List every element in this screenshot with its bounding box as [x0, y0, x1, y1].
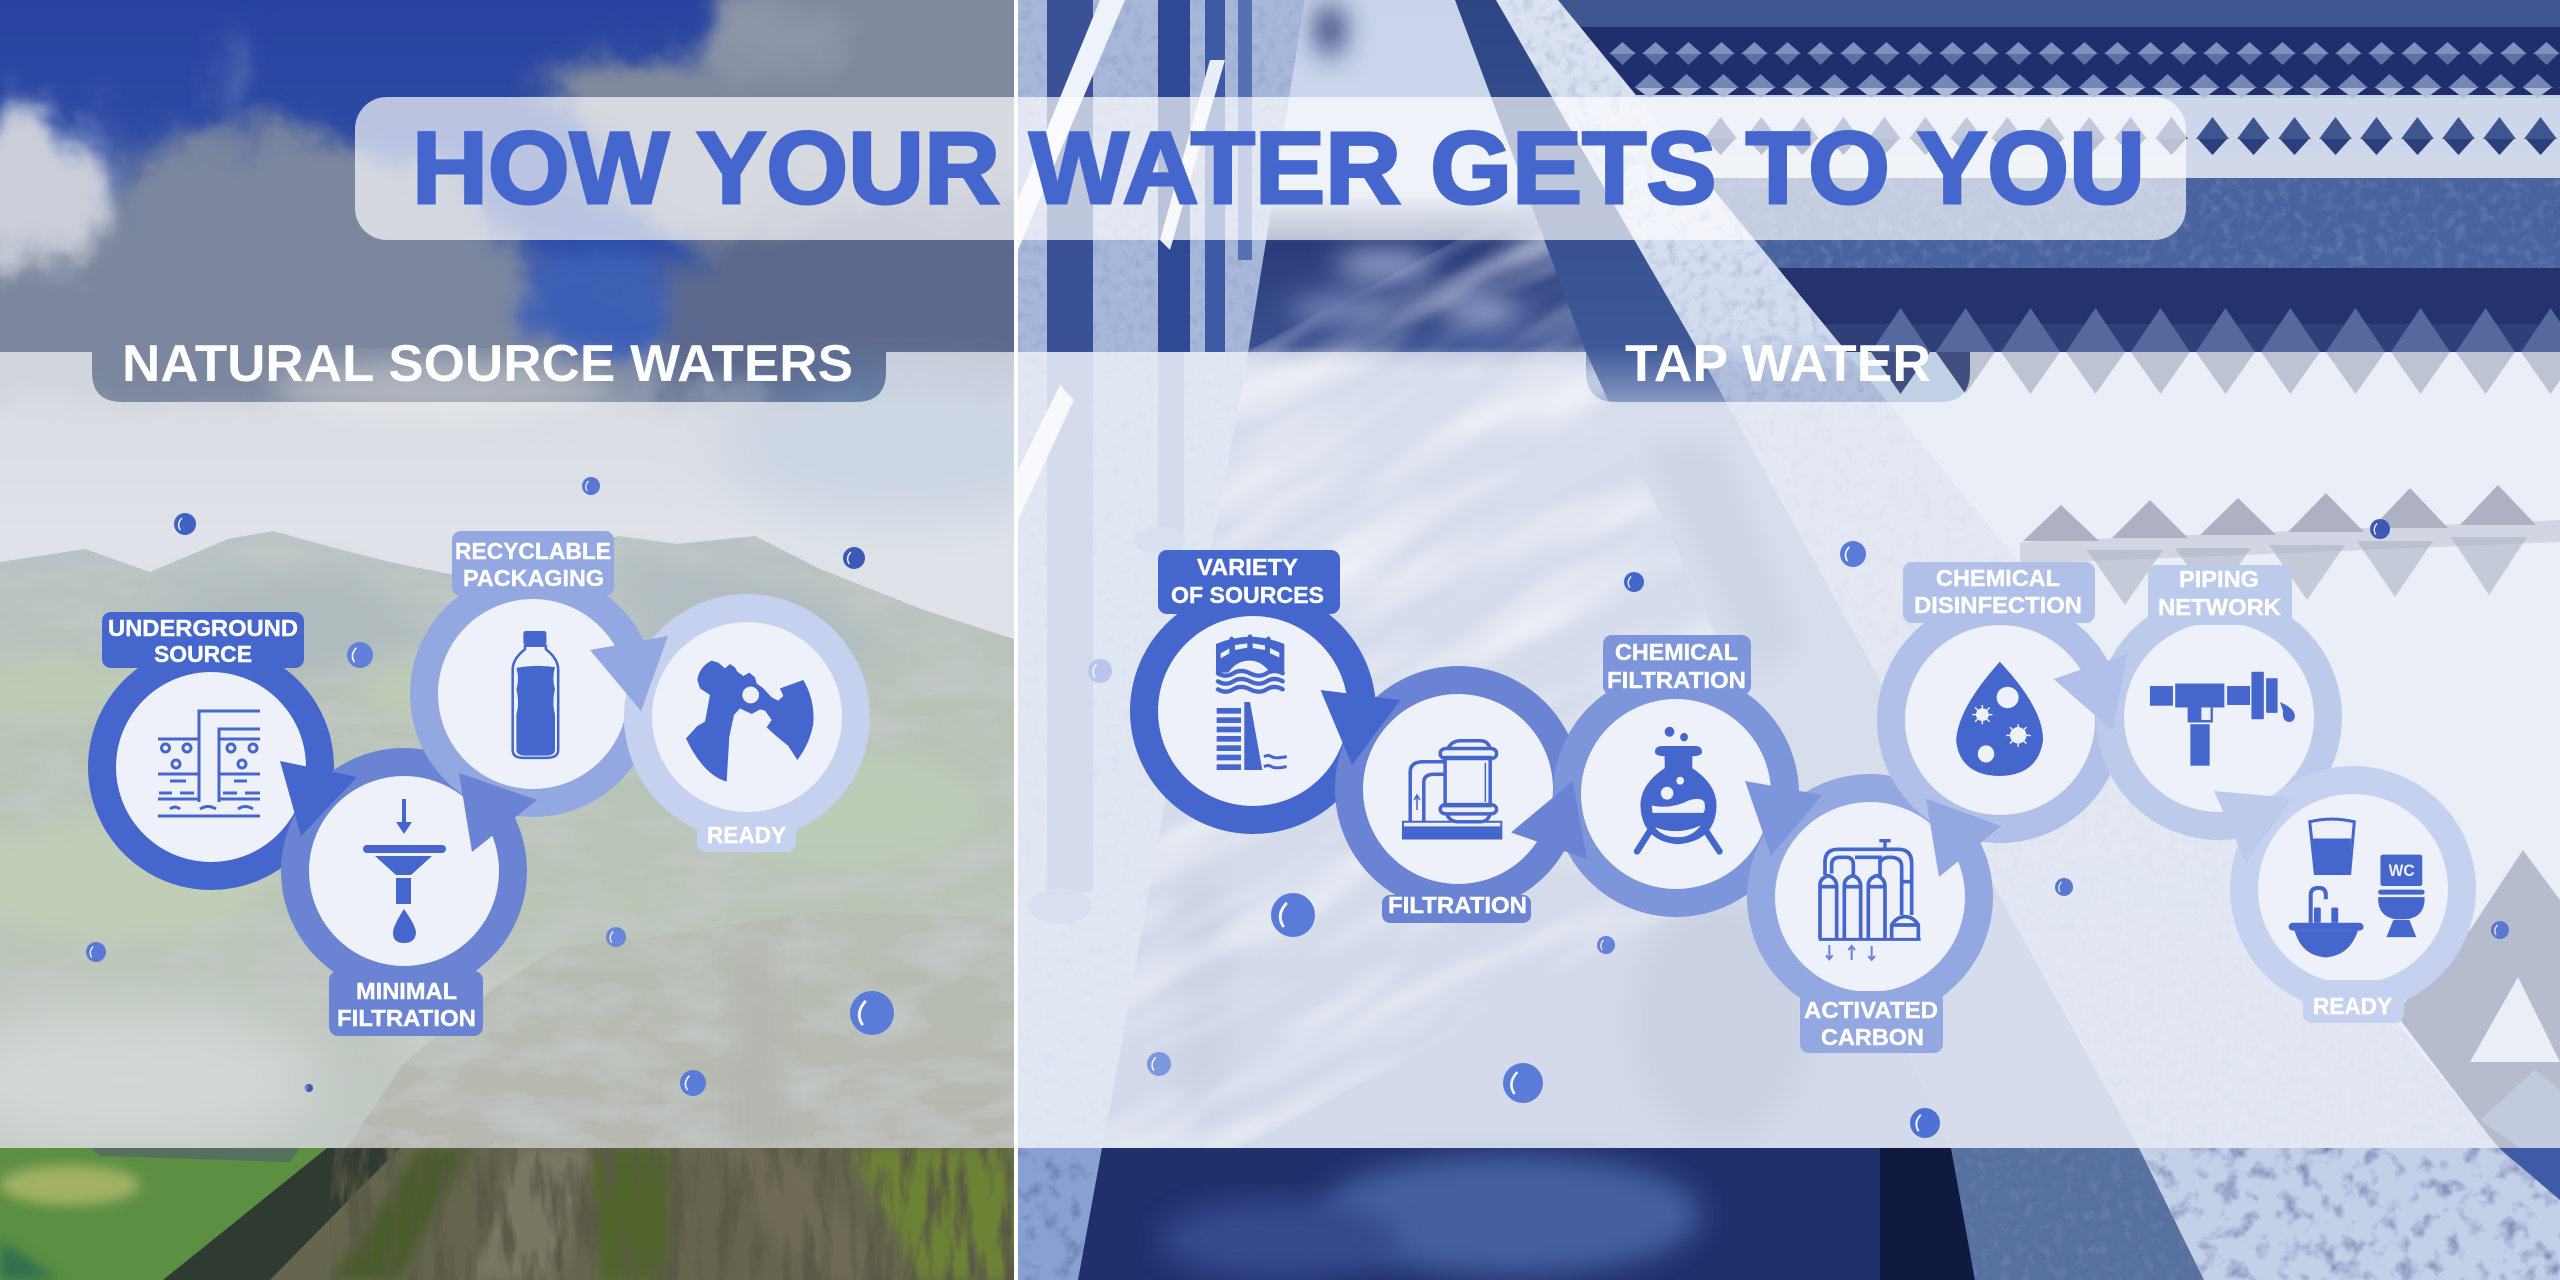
- icon: funnel filter and drop: [363, 799, 446, 943]
- step: ready to use at tap: READY: [2313, 993, 2392, 1019]
- water droplets: natural source panel: [86, 477, 894, 1096]
- icon: water bottle: [513, 631, 558, 758]
- step: ready to drink: READY: [707, 822, 786, 848]
- step: minimal filtration: MINIMAL: [356, 978, 457, 1004]
- icon: carbon filter cylinders: [1819, 841, 1921, 960]
- step: filtration: FILTRATION: [1388, 892, 1527, 918]
- arrow: minimal filtration to recyclable packaging: [459, 773, 537, 852]
- icon: water drop with microbes: [1956, 662, 2043, 776]
- arrow: underground source to minimal filtration: [280, 761, 357, 836]
- step: recyclable packaging: PACKAGING: [463, 565, 604, 591]
- icon: well shaft through ground layers: [158, 711, 260, 816]
- arrow: variety of sources to filtration: [1320, 690, 1400, 765]
- step: variety of sources: [1130, 550, 1376, 834]
- arrow: piping network to ready: [2214, 791, 2292, 863]
- icon: person drinking from bottle: [686, 661, 814, 782]
- title pill: [355, 97, 2186, 240]
- icon: reservoir bridge and dam: [1216, 634, 1287, 770]
- step: underground source: [88, 612, 334, 890]
- translucent white overlay panel with section tab cut-outs: [0, 352, 2560, 1148]
- step: ready to use at tap: [2230, 766, 2476, 1023]
- background photo: mountain landscape and sky: [0, 0, 1014, 1148]
- step: minimal filtration: [281, 748, 527, 1036]
- title: HOW YOUR WATER GETS TO YOU: [412, 111, 2145, 225]
- step: chemical filtration: FILTRATION: [1607, 667, 1746, 693]
- icon: glass, sink and toilet: [2289, 819, 2425, 957]
- background photo: water treatment channel and tanks: [1018, 0, 2560, 1280]
- step: chemical filtration: [1553, 635, 1799, 917]
- step: piping network: PIPING: [2179, 566, 2259, 592]
- step: activated carbon: CARBON: [1821, 1024, 1924, 1050]
- step: activated carbon: ACTIVATED: [1804, 997, 1938, 1023]
- water droplets: tap water panel: [1088, 519, 2509, 1138]
- arrow: activated carbon to chemical disinfection: [1926, 799, 2001, 877]
- step: piping network: NETWORK: [2158, 594, 2281, 620]
- step: minimal filtration: FILTRATION: [337, 1005, 476, 1031]
- bottom strip: mountain foreground: [0, 1148, 1014, 1280]
- step: piping network: [2096, 565, 2342, 840]
- step: activated carbon: [1747, 774, 1993, 1053]
- step: underground source: UNDERGROUND: [108, 615, 298, 641]
- arrow: filtration to chemical filtration: [1511, 781, 1587, 859]
- icon: chemistry flask: [1637, 727, 1719, 851]
- step: chemical filtration: CHEMICAL: [1615, 639, 1738, 665]
- divider between the two panels: [1014, 0, 1018, 1280]
- heading: natural source waters: NATURAL SOURCE WATERS: [122, 335, 853, 393]
- icon: filter tank with pipes: [1403, 741, 1501, 839]
- step: recyclable packaging: RECYCLABLE: [455, 538, 611, 564]
- step: chemical disinfection: [1877, 562, 2123, 843]
- step: variety of sources: VARIETY: [1197, 554, 1298, 580]
- icon: glass, sink and toilet: WC: [2389, 862, 2415, 880]
- step: filtration: [1335, 666, 1581, 923]
- heading: tap water: TAP WATER: [1625, 335, 1931, 393]
- step: ready to drink: [624, 594, 870, 852]
- step: chemical disinfection: CHEMICAL: [1936, 565, 2060, 591]
- arrow: recyclable packaging to ready: [590, 636, 668, 711]
- step: chemical disinfection: DISINFECTION: [1914, 592, 2082, 618]
- step: recyclable packaging: [410, 531, 656, 817]
- arrow: chemical disinfection to piping network: [2054, 654, 2127, 731]
- step: variety of sources: OF SOURCES: [1171, 582, 1324, 608]
- step: underground source: SOURCE: [154, 641, 252, 667]
- arrow: chemical filtration to activated carbon: [1745, 781, 1822, 856]
- icon: pipe junction with dripping valve: [2150, 672, 2295, 766]
- bottom strip: dark channel water: [1014, 1148, 2560, 1280]
